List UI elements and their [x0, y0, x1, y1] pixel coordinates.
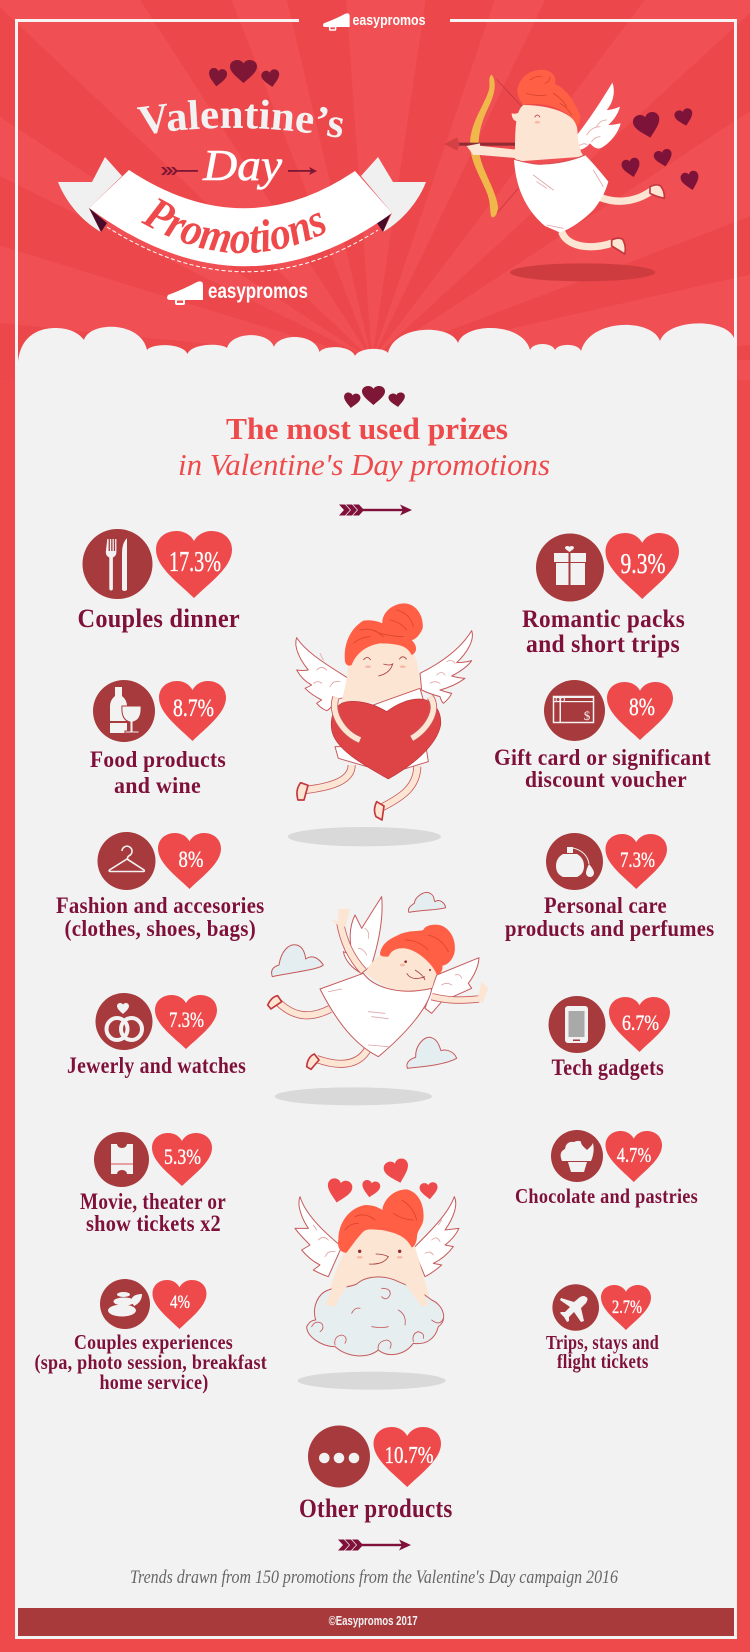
icon: three hearts above title: [207, 60, 281, 88]
prize: couples dinner: [78, 529, 240, 633]
arrow: divider bottom: [338, 1540, 411, 1550]
icon: three hearts: [343, 386, 406, 409]
title block: Valentine's Day Promotions: [58, 60, 426, 272]
prize: trips: [546, 1284, 659, 1373]
prize: other products: Other products: [299, 1494, 452, 1523]
prize: trips: flight tickets: [557, 1351, 649, 1373]
prize: food products: and wine: [114, 773, 201, 798]
icon: fork and knife: [106, 538, 127, 591]
prize: tech gadgets: Tech gadgets: [552, 1055, 664, 1080]
icon: three dots: [319, 1453, 359, 1463]
icon: gift card: [553, 696, 594, 723]
icon: cupcake: [561, 1139, 594, 1172]
cloud bottom right: [407, 1037, 457, 1068]
prize: couples experiences: [34, 1279, 267, 1394]
prize: food products: 8.7%: [173, 695, 214, 722]
prize: fashion: 8%: [178, 847, 204, 872]
prize: movie tickets: show tickets x2: [86, 1211, 221, 1236]
prize: fashion: [56, 832, 264, 941]
arrow: right of Day: [288, 167, 317, 175]
prize: gift card: discount voucher: [525, 767, 687, 792]
prize: movie tickets: Movie, theater or: [80, 1189, 226, 1214]
prize: jewelry: Jewerly and watches: [67, 1053, 246, 1078]
background: red sunburst: [0, 0, 750, 860]
top logo: easypromos: easypromos: [352, 12, 426, 29]
heading: Day: Day: [202, 141, 282, 190]
illustration: cupid hugging heart: [288, 603, 472, 846]
icon: perfume bottle: [556, 847, 594, 877]
panel: main light background with clouds: [15, 323, 737, 1639]
icon: airplane: [560, 1296, 588, 1322]
prize: romantic packs: [522, 533, 685, 658]
prize: fashion: (clothes, shoes, bags): [64, 916, 256, 941]
prize: movie tickets: [80, 1132, 226, 1236]
prize: romantic packs: and short trips: [526, 631, 680, 658]
prize: food products: [90, 680, 226, 798]
section heading: the most used prizes: [178, 386, 550, 482]
heading line 2: in Valentine's Day promotions: [178, 447, 550, 482]
footer bar: ©Easypromos 2017: [329, 1613, 418, 1628]
cloud left: [272, 945, 323, 977]
logo: easypromos: [167, 280, 308, 305]
prize: couples dinner: Couples dinner: [78, 604, 240, 633]
footnote: Trends drawn from 150 promotions from the Valentine's Day campaign 2016: [130, 1567, 618, 1588]
prize: food products: Food products: [90, 747, 226, 772]
prize: movie tickets: 5.3%: [164, 1144, 201, 1169]
prize: tech gadgets: 6.7%: [622, 1010, 659, 1035]
prize: tech gadgets: [548, 996, 670, 1080]
prize: couples experiences: home service): [100, 1370, 208, 1394]
prize: personal care: products and perfumes: [505, 916, 714, 941]
icon: spa stones: [108, 1292, 142, 1316]
prize: trips: Trips, stays and: [546, 1332, 659, 1354]
cloud top right: [408, 892, 446, 912]
prize: personal care: [505, 833, 714, 941]
icon: gift card: $: [584, 708, 591, 723]
prize: chocolate and pastries: [515, 1130, 698, 1208]
prize: personal care: 7.3%: [620, 847, 655, 872]
icon: ticket: [111, 1144, 133, 1174]
prize: gift card: Gift card or significant: [494, 745, 711, 770]
prize: romantic packs: 9.3%: [620, 549, 666, 580]
hearts flying from cupid: [620, 107, 701, 192]
prize: chocolate and pastries: Chocolate and pastries: [515, 1184, 698, 1208]
prize: couples experiences: 4%: [170, 1292, 190, 1313]
illustration: cupid with bow: [444, 70, 701, 281]
illustration: cupid on cloud: [295, 1157, 459, 1390]
heading: Valentine's: Valentine’s: [136, 100, 343, 138]
logo: easypromos: easypromos: [208, 280, 308, 303]
icon: bottle and glass: [110, 687, 141, 733]
illustration: flying cupid with clouds: [268, 892, 488, 1105]
prize: other products: 10.7%: [384, 1443, 434, 1469]
prize: jewelry: [67, 993, 246, 1078]
prize: gift card: [494, 680, 711, 792]
hearts above cupid: [325, 1157, 439, 1205]
icon: gift box: [554, 546, 586, 585]
prize: couples experiences: Couples experiences: [74, 1330, 233, 1354]
prize: gift card: 8%: [629, 694, 655, 721]
prize: personal care: Personal care: [544, 893, 667, 918]
prize: couples experiences: (spa, photo session, breakfast: [34, 1350, 267, 1374]
icon: phone: [565, 1006, 588, 1043]
heading: Promotions: Promotions: [141, 198, 326, 254]
top logo: easypromos: [323, 12, 426, 31]
prize: trips: 2.7%: [612, 1297, 642, 1318]
icon: rings: [106, 1003, 142, 1040]
arrow: divider top: [339, 504, 412, 516]
heading line 1: The most used prizes: [226, 411, 508, 446]
prize: jewelry: 7.3%: [169, 1007, 204, 1032]
prize: fashion: Fashion and accesories: [56, 893, 264, 918]
prize: romantic packs: Romantic packs: [522, 606, 685, 633]
prize: chocolate and pastries: 4.7%: [617, 1143, 651, 1167]
icon: hanger: [109, 846, 144, 872]
prize: couples dinner: 17.3%: [169, 547, 221, 578]
white frame line: [15, 19, 737, 365]
prize: other products: [299, 1426, 452, 1523]
footer bar: [18, 1608, 734, 1636]
arrow: left of Day: [161, 167, 198, 175]
ribbon banner: [58, 157, 426, 272]
